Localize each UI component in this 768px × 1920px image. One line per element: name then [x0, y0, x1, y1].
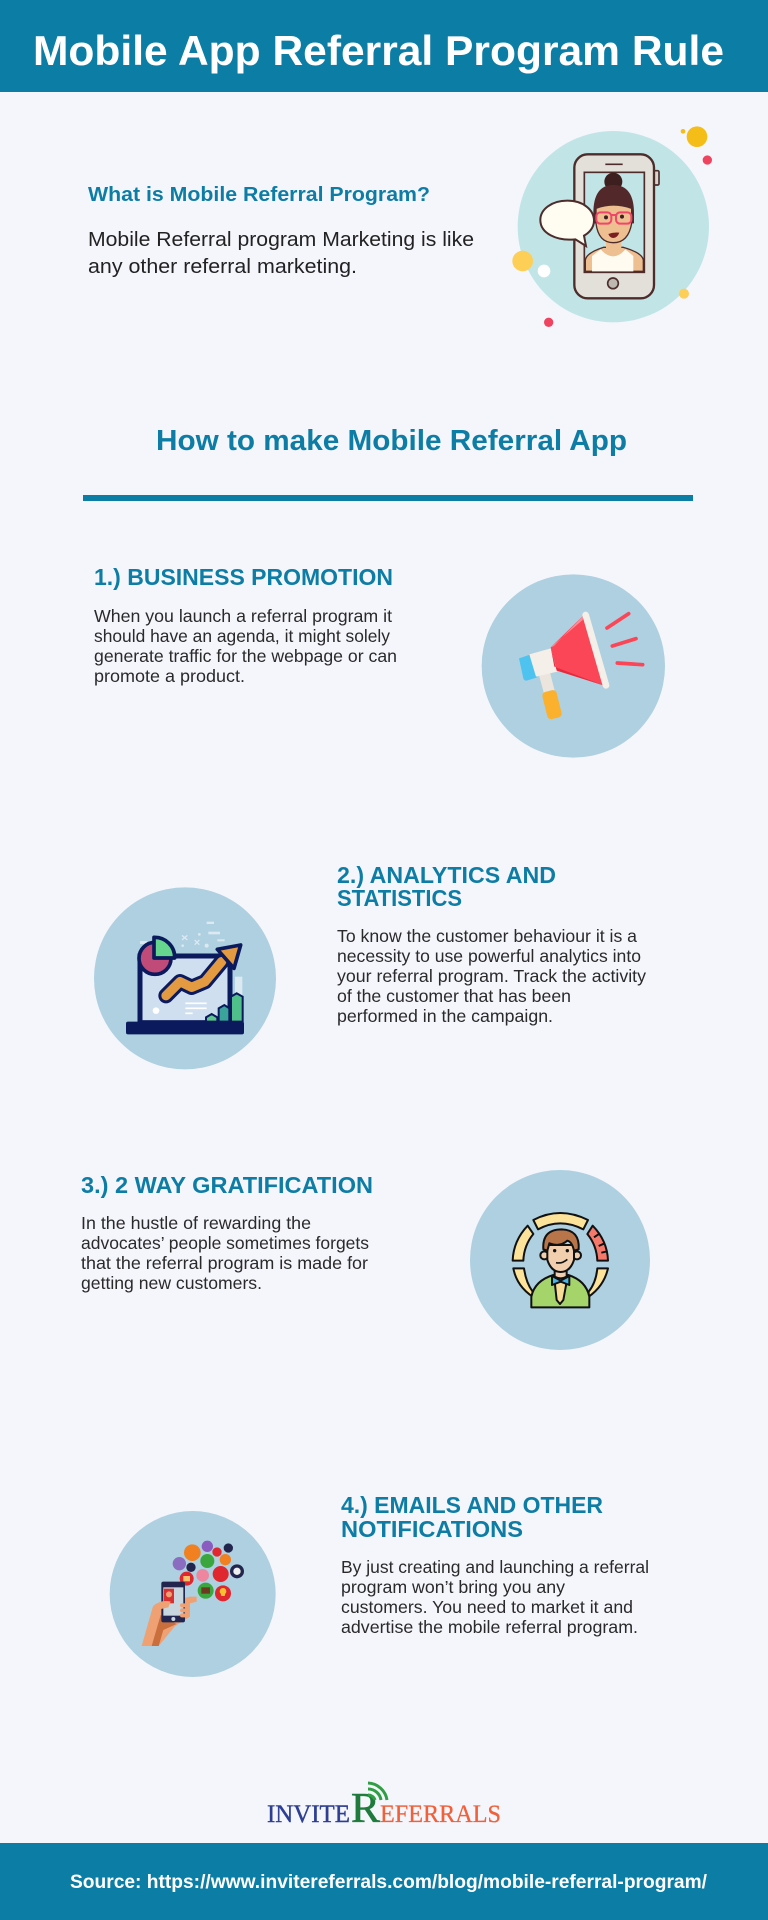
step 2 text: performed in the campaign. — [337, 1006, 553, 1026]
step 4 heading: NOTIFICATIONS — [341, 1516, 523, 1542]
logo: InviteReferrals: R — [351, 1786, 380, 1832]
section heading: How to make Mobile Referral App — [156, 425, 627, 457]
panel: step 1 business promotion — [94, 564, 665, 758]
logo: InviteReferrals: EFERRALS — [380, 1801, 501, 1828]
step 2 text: To know the customer behaviour it is a — [337, 926, 637, 946]
panel: step 3 two way gratification — [81, 1170, 650, 1350]
step 2 heading: 2.) ANALYTICS AND — [337, 862, 556, 888]
step 1 heading: 1.) BUSINESS PROMOTION — [94, 564, 393, 590]
step 2 heading: STATISTICS — [337, 885, 462, 911]
intro paragraph: Mobile Referral program Marketing is like — [88, 228, 474, 251]
icon: laptop with growth chart — [94, 887, 276, 1069]
step 4 text: advertise the mobile referral program. — [341, 1617, 638, 1637]
step 1 text: should have an agenda, it might solely — [94, 626, 390, 646]
step 4 text — [341, 1557, 649, 1637]
step 1 text: generate traffic for the webpage or can — [94, 646, 397, 666]
header banner — [0, 0, 768, 92]
step 3 text: that the referral program is made for — [81, 1253, 368, 1273]
step 3 text — [81, 1213, 369, 1293]
panel: step 4 emails and notifications — [110, 1492, 649, 1677]
step 2 text — [337, 926, 646, 1026]
logo: InviteReferrals: INVITE — [267, 1801, 350, 1828]
step 3 heading: 3.) 2 WAY GRATIFICATION — [81, 1172, 373, 1198]
footer banner — [0, 1843, 768, 1920]
panel: step 2 analytics and statistics — [94, 862, 646, 1069]
step 1 text: promote a product. — [94, 666, 245, 686]
step 4 text: customers. You need to market it and — [341, 1597, 633, 1617]
intro heading: What is Mobile Referral Program? — [88, 184, 430, 206]
step 4 heading — [341, 1492, 603, 1542]
step 3 text: getting new customers. — [81, 1273, 262, 1293]
icon: hand holding phone with app bubbles — [110, 1511, 276, 1677]
source text: Source: https://www.invitereferrals.com/blog/mobile-referral-program/ — [70, 1871, 708, 1893]
title: Mobile App Referral Program Rule — [33, 27, 724, 74]
intro paragraph: any other referral marketing. — [88, 255, 357, 278]
icon: woman on phone screen — [512, 126, 712, 327]
step 2 text: necessity to use powerful analytics into — [337, 946, 641, 966]
intro paragraph — [88, 228, 474, 278]
step 2 heading — [337, 862, 556, 911]
step 3 text: advocates’ people sometimes forgets — [81, 1233, 369, 1253]
step 4 text: By just creating and launching a referral — [341, 1557, 649, 1577]
step 1 text — [94, 606, 397, 686]
step 1 text: When you launch a referral program it — [94, 606, 392, 626]
step 2 text: your referral program. Track the activity — [337, 966, 646, 986]
step 2 text: of the customer that has been — [337, 986, 571, 1006]
step 4 heading: 4.) EMAILS AND OTHER — [341, 1492, 603, 1518]
icon: megaphone — [482, 574, 665, 758]
intro text block — [88, 184, 474, 278]
step 4 text: program won’t bring you any — [341, 1577, 565, 1597]
icon: person with ring gauge — [470, 1170, 650, 1350]
step 3 text: In the hustle of rewarding the — [81, 1213, 311, 1233]
logo: InviteReferrals — [267, 1783, 501, 1832]
